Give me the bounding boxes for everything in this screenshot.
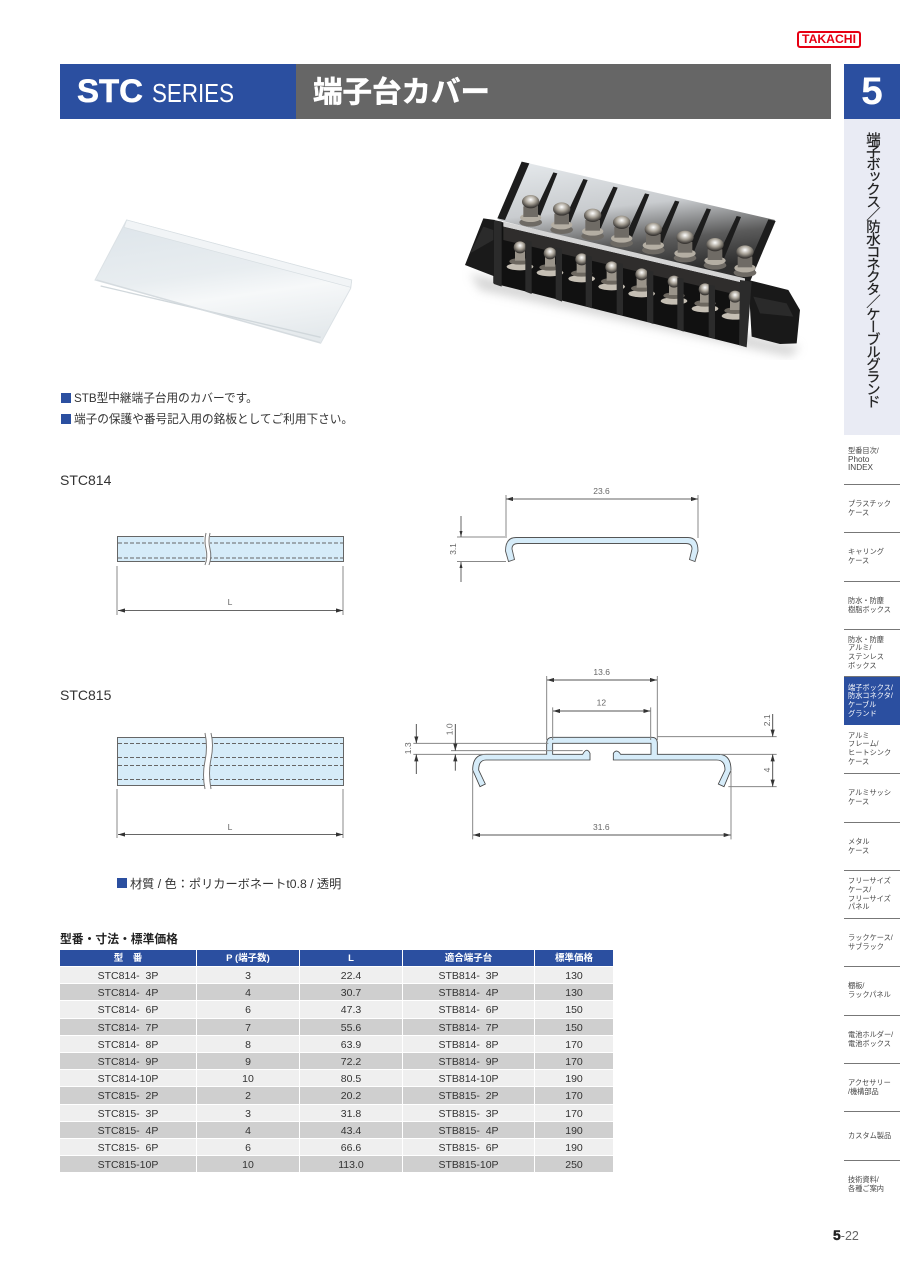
nav: aluminum sash (844, 774, 900, 823)
row: 22.4 (341, 970, 361, 982)
nav: plastic case: ケース (848, 508, 869, 516)
table header: P (端子数) (226, 953, 270, 964)
nav: battery holder: 電池ボックス (848, 1038, 891, 1048)
table header: 標準価格 (555, 953, 593, 964)
product title block: 端子台カバー (313, 76, 490, 109)
nav: battery holder (844, 1016, 900, 1064)
row: 7 (245, 1022, 251, 1034)
nav: free size: フリーサイズ (848, 876, 891, 885)
nav: accessories: アクセサリー (848, 1078, 891, 1087)
front fins (494, 220, 752, 347)
nav: metal case (844, 823, 900, 871)
row: 113.0 (338, 1159, 364, 1171)
nav: accessories: /機構部品 (848, 1086, 879, 1096)
row: 170 (565, 1090, 583, 1102)
chapter vertical title (844, 119, 900, 435)
nav: waterproof aluminum box: ボックス (848, 661, 877, 670)
nav: rack case: サブラック (848, 942, 884, 950)
row: 66.6 (341, 1142, 361, 1154)
row: STC815- 2P (98, 1090, 158, 1102)
nav: technical info (848, 1175, 884, 1193)
nav: carrying case (844, 533, 900, 582)
nav: plastic case (844, 485, 900, 533)
nav: index: INDEX (848, 463, 873, 472)
diagram: STC815 profile: 13.6 (593, 667, 610, 677)
nav: terminal box active: 防水コネクタ/ (848, 691, 893, 700)
nav: rack case: ラックケース/ (848, 933, 893, 942)
row: 8 (245, 1039, 251, 1051)
row: 4 (245, 1125, 251, 1137)
logo: TAKACHI: TAKACHI (802, 32, 856, 46)
row: 170 (565, 1056, 583, 1068)
row: 43.4 (341, 1125, 361, 1137)
label: STC815: STC815 (60, 687, 111, 703)
nav: shelf (844, 967, 900, 1016)
chapter number tab: 5 (861, 70, 883, 113)
nav: index (844, 436, 900, 485)
nav: terminal box active: グランド (848, 709, 877, 718)
row: 170 (565, 1108, 583, 1120)
row: 47.3 (341, 1004, 361, 1016)
row: 63.9 (341, 1039, 361, 1051)
row: 6 (245, 1142, 251, 1154)
nav: waterproof resin box (844, 582, 900, 630)
cover glass (498, 162, 775, 282)
row (60, 1156, 613, 1173)
nav: waterproof aluminum box: 防水・防塵 (848, 635, 884, 644)
row: 3 (245, 970, 251, 982)
nav: terminal box active: 端子ボックス/ (848, 683, 893, 692)
label: STC814: STC814 (60, 472, 111, 488)
left mount (465, 218, 495, 277)
nav: shelf: 棚板/ (848, 981, 864, 990)
row: STB815- 4P (438, 1125, 499, 1137)
row: 4 (245, 987, 251, 999)
row: STB815-10P (438, 1159, 499, 1171)
nav: metal case: ケース (848, 846, 869, 854)
diagram: STC815 profile (403, 667, 777, 840)
nav: carrying case: キャリング (848, 547, 884, 556)
row: STB814- 7P (438, 1022, 499, 1034)
row: STC815- 6P (98, 1142, 158, 1154)
row: STC814-10P (98, 1073, 158, 1085)
feature text 1: STB型中継端子台用のカバーです。 (74, 392, 258, 405)
diagram: STC815 profile: 1.3 (403, 742, 413, 754)
row: 150 (565, 1022, 583, 1034)
series name block: STC (77, 73, 143, 109)
row: STB814- 9P (438, 1056, 499, 1068)
row: 130 (565, 987, 583, 999)
row: 150 (565, 1004, 583, 1016)
row (60, 984, 613, 1001)
row (60, 1019, 613, 1036)
row (60, 1036, 613, 1053)
row: STB814- 8P (438, 1039, 499, 1051)
chapter vertical title: 端子ボックス／防水コネクタ／ケーブルグランド (864, 132, 880, 407)
nav: plastic case: プラスチック (848, 499, 891, 508)
row: 130 (565, 970, 583, 982)
table header (60, 950, 613, 967)
nav: waterproof resin box: 樹脂ボックス (848, 604, 891, 614)
diagram: STC815 front view: L (228, 822, 233, 832)
nav: waterproof aluminum box (844, 630, 900, 677)
table heading: 型番・寸法・標準価格 (60, 932, 178, 946)
silver rail (503, 222, 745, 283)
row (60, 1122, 613, 1139)
row: 2 (245, 1090, 251, 1102)
nav: rack case (844, 919, 900, 967)
row: 10 (242, 1159, 254, 1171)
nav: metal case: メタル (848, 837, 870, 846)
row: STC814- 7P (98, 1022, 158, 1034)
row: STC815-10P (98, 1159, 158, 1171)
row: STB814- 6P (438, 1004, 499, 1016)
row: STC814- 6P (98, 1004, 158, 1016)
row (60, 967, 613, 984)
row (60, 1053, 613, 1070)
nav: waterproof aluminum box: アルミ/ (848, 643, 872, 652)
diagram: STC814 front view: L (228, 597, 233, 607)
nav: custom (844, 1112, 900, 1161)
feature text 2: 端子の保護や番号記入用の銘板としてご利用下さい。 (74, 413, 353, 426)
row: 31.8 (341, 1108, 361, 1120)
row: 55.6 (341, 1022, 361, 1034)
logo: TAKACHI (797, 31, 861, 48)
lower screws (507, 241, 533, 270)
photo: clear cover (94, 220, 352, 344)
diagram: STC814 profile (448, 486, 698, 582)
row: STB815- 6P (438, 1142, 499, 1154)
diagram: STC814 front view (116, 532, 344, 615)
row: STB815- 3P (438, 1108, 499, 1120)
row: STC814- 8P (98, 1039, 158, 1051)
chapter number tab (844, 64, 900, 119)
row: 190 (565, 1142, 583, 1154)
nav: aluminum frame: ヒートシンク (848, 748, 891, 757)
nav: carrying case: ケース (848, 556, 869, 565)
nav: waterproof resin box: 防水・防塵 (848, 596, 884, 605)
nav: aluminum sash: ケース (848, 797, 869, 806)
cover partitions (497, 162, 776, 282)
diagram: STC815 front view (116, 732, 344, 838)
nav: technical info: 各種ご案内 (848, 1184, 884, 1193)
row (60, 1070, 613, 1087)
row: 9 (245, 1056, 251, 1068)
row: STB814-10P (438, 1073, 499, 1085)
table header: L (348, 953, 354, 964)
row: 20.2 (341, 1090, 361, 1102)
row: STC814- 3P (98, 970, 158, 982)
diagram: STC814 profile: 23.6 (593, 486, 610, 496)
nav: shelf: ラックパネル (848, 990, 891, 999)
photo: terminal block (465, 162, 800, 360)
row: 3 (245, 1108, 251, 1120)
row: 190 (565, 1125, 583, 1137)
series name block (60, 64, 296, 119)
title banner (60, 64, 831, 119)
nav: waterproof aluminum box: ステンレス (848, 652, 884, 661)
diagram: STC815 profile: 1.0 (445, 723, 455, 735)
table header: 型 番 (114, 953, 142, 964)
row: 80.5 (341, 1073, 361, 1085)
right mount (748, 280, 800, 344)
nav: aluminum frame (844, 725, 900, 774)
diagram: STC815 profile: 12 (597, 698, 606, 708)
nav: technical info: 技術資料/ (848, 1175, 879, 1184)
diagram: STC815 profile: 2.1 (762, 714, 772, 726)
nav: free size: フリーサイズ (848, 894, 891, 902)
table header: 適合端子台 (445, 953, 492, 964)
nav: aluminum frame: フレーム/ (848, 739, 879, 748)
nav: battery holder: 電池ホルダー/ (848, 1030, 893, 1039)
nav: terminal box active (844, 677, 900, 725)
nav: free size: ケース/ (848, 885, 871, 894)
row: 30.7 (341, 987, 361, 999)
row: STC814- 4P (98, 987, 158, 999)
product title block (296, 64, 831, 119)
page number: 5-22 (833, 1227, 859, 1243)
nav: terminal box active: ケーブル (848, 700, 876, 709)
nav: aluminum frame: ケース (848, 757, 869, 766)
nav: index: Photo (848, 455, 869, 464)
row (60, 1087, 613, 1104)
diagram: STC815 profile: 4 (762, 767, 772, 772)
body (493, 220, 750, 347)
row: 190 (565, 1073, 583, 1085)
row: STC815- 4P (98, 1125, 158, 1137)
series name block: SERIES (152, 78, 234, 108)
row: STB815- 2P (438, 1090, 499, 1102)
nav: free size: パネル (848, 902, 870, 911)
diagram: STC815 profile: 31.6 (593, 822, 610, 832)
upper screws (519, 195, 542, 227)
row: 10 (242, 1073, 254, 1085)
nav: custom: カスタム製品 (848, 1131, 891, 1140)
row: 250 (565, 1159, 583, 1171)
shadow (470, 273, 800, 357)
nav: aluminum sash: アルミサッシ (848, 788, 891, 797)
nav: accessories (844, 1064, 900, 1112)
row: STB814- 4P (438, 987, 499, 999)
row: STC815- 3P (98, 1108, 158, 1120)
row: 170 (565, 1039, 583, 1051)
row: 72.2 (341, 1056, 361, 1068)
row: 6 (245, 1004, 251, 1016)
diagram: STC814 profile: 3.1 (448, 543, 458, 555)
row: STC814- 9P (98, 1056, 158, 1068)
price table (60, 950, 613, 1172)
row (60, 1104, 613, 1122)
row: STB814- 3P (438, 970, 499, 982)
nav: index: 型番目次/ (848, 446, 879, 455)
material text: 材質 / 色：ポリカーボネートt0.8 / 透明 (130, 877, 341, 891)
row (60, 1139, 613, 1156)
nav: aluminum frame: アルミ (848, 731, 870, 740)
nav: free size (844, 871, 900, 919)
row (60, 1001, 613, 1019)
